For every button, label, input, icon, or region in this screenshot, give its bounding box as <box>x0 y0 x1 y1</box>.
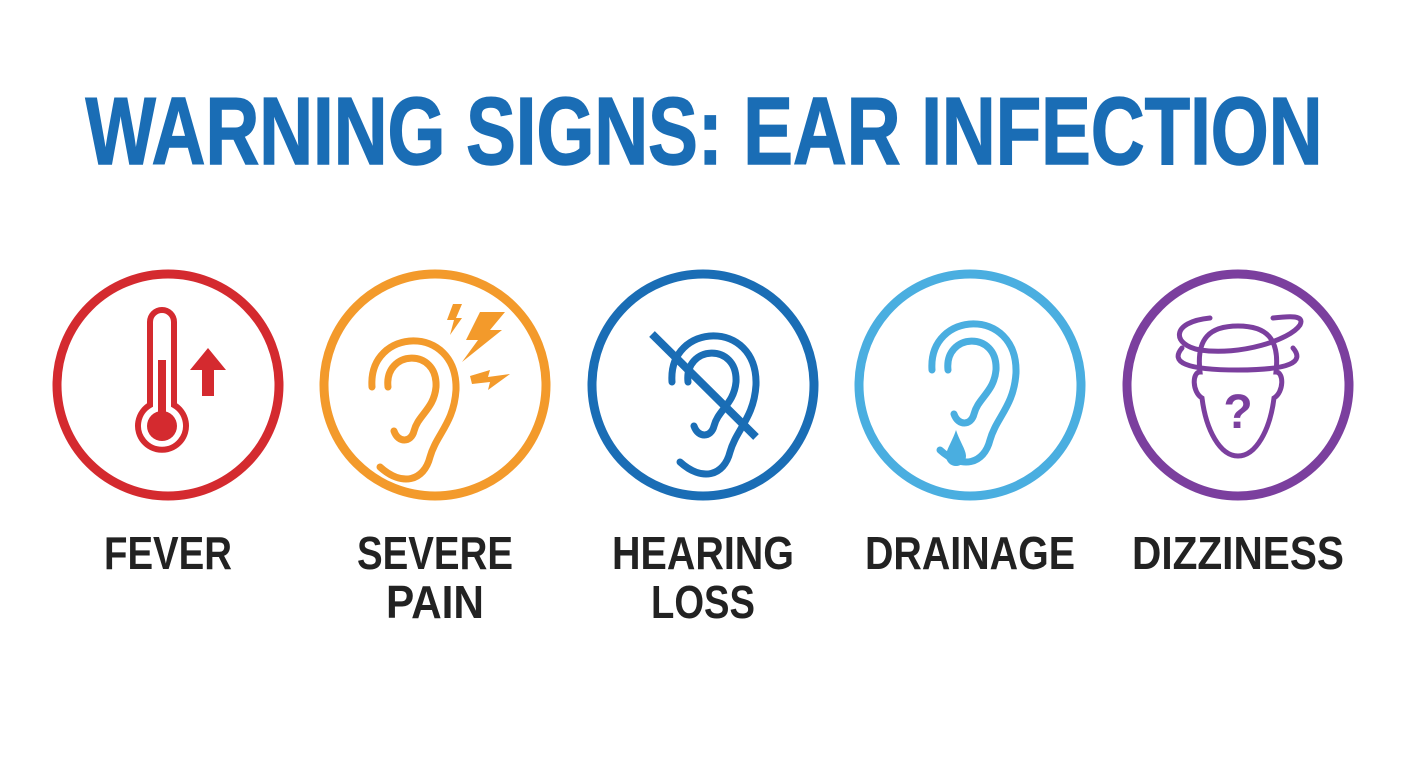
icon: dizzy head <box>1178 317 1301 456</box>
panel: hearing loss <box>592 274 814 628</box>
icon: dizzy head: ? <box>1223 386 1253 439</box>
panel: severe pain <box>324 274 546 628</box>
panel: severe pain: PAIN <box>386 576 484 628</box>
label: dizziness: DIZZINESS <box>1132 527 1344 579</box>
panel: dizziness <box>1127 274 1349 579</box>
panel: hearing loss: LOSS <box>651 576 755 628</box>
icon: ear with pain bolts <box>372 304 510 479</box>
panel: fever <box>57 274 279 579</box>
icon: ear with drop <box>932 324 1016 466</box>
label: drainage: DRAINAGE <box>865 527 1075 579</box>
icon: thermometer <box>138 310 226 450</box>
label: hearing loss: HEARING <box>612 527 794 579</box>
icon: crossed ear <box>652 334 756 474</box>
panel: drainage <box>859 274 1081 579</box>
label: severe pain: SEVERE <box>357 527 513 579</box>
label: fever: FEVER <box>104 527 232 579</box>
